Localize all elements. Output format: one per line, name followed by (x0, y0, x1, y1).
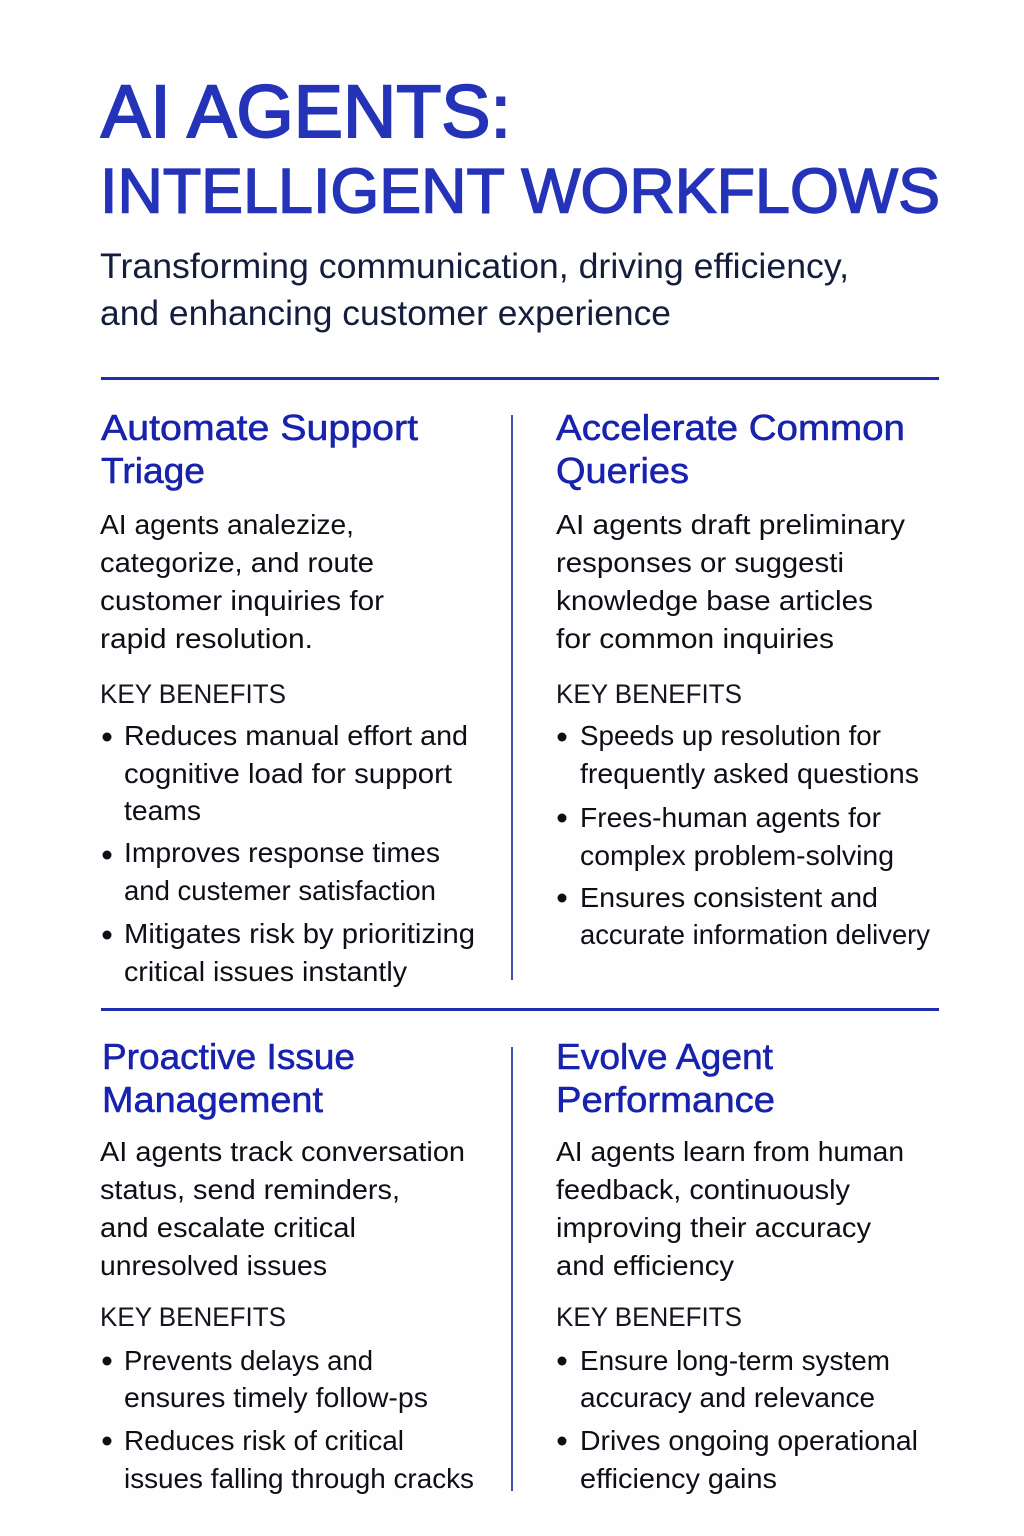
label: key benefits: KEY BENEFITS (556, 1302, 742, 1332)
benefits list: complex problem-solving (580, 840, 894, 871)
heading: proactive issue management: Management (102, 1079, 323, 1120)
benefits list: accuracy and relevance (580, 1382, 875, 1413)
heading: accelerate common queries: Accelerate Common (556, 407, 905, 448)
description: evolve agent performance (556, 1136, 904, 1281)
description: evolve agent performance: and efficiency (556, 1250, 734, 1281)
benefits list: Reduces manual effort and (124, 720, 468, 751)
benefits list: cognitive load for support (124, 758, 452, 789)
benefits list: ensures timely follow-ps (124, 1382, 428, 1413)
benefits list (102, 1345, 474, 1494)
panel: accelerate common queries (556, 407, 930, 950)
benefits list (558, 720, 930, 950)
heading: evolve agent performance: Performance (556, 1079, 775, 1120)
benefits list: Ensure long-term system (580, 1345, 890, 1376)
title: AI AGENTS: (101, 70, 511, 153)
heading: evolve agent performance (556, 1036, 775, 1120)
benefits list: Ensures consistent and (580, 882, 878, 913)
label: key benefits: KEY BENEFITS (100, 1302, 286, 1332)
subtitle: and enhancing customer experience (100, 294, 671, 333)
panel: proactive issue management (100, 1036, 474, 1494)
description: accelerate common queries: knowledge base articles (556, 585, 873, 616)
description: automate support triage: customer inquiries for (100, 585, 384, 616)
subtitle: Transforming communication, driving efficiency, (100, 247, 849, 286)
benefits list: Frees-human agents for (580, 802, 881, 833)
heading: automate support triage (101, 407, 418, 491)
description: proactive issue management (100, 1136, 465, 1281)
label: key benefits: KEY BENEFITS (100, 679, 286, 709)
description: proactive issue management: unresolved issues (100, 1250, 327, 1281)
heading: accelerate common queries: Queries (556, 450, 689, 491)
benefits list: Improves response times (124, 837, 440, 868)
benefits list: accurate information delivery (580, 919, 930, 950)
subtitle (100, 247, 849, 333)
heading: proactive issue management (102, 1036, 355, 1120)
description: proactive issue management: status, send reminders, (100, 1174, 400, 1205)
heading: automate support triage: Automate Support (101, 407, 418, 448)
panel: evolve agent performance (556, 1036, 918, 1494)
description: accelerate common queries: AI agents draft preliminary (556, 509, 905, 540)
benefits list: Prevents delays and (124, 1345, 373, 1376)
description: automate support triage: AI agents analezize, (100, 509, 354, 540)
benefits list: Reduces risk of critical (124, 1425, 404, 1456)
label: key benefits: KEY BENEFITS (556, 679, 742, 709)
benefits list: Drives ongoing operational (580, 1425, 918, 1456)
description: evolve agent performance: feedback, continuously (556, 1174, 850, 1205)
description: automate support triage: categorize, and route (100, 547, 374, 578)
benefits list: Mitigates risk by prioritizing (124, 918, 475, 949)
panel: automate support triage (100, 407, 475, 987)
benefits list (102, 720, 475, 987)
description: proactive issue management: AI agents track conversation (100, 1136, 465, 1167)
description: accelerate common queries (556, 509, 905, 654)
heading: automate support triage: Triage (101, 450, 205, 491)
benefits list: issues falling through cracks (124, 1463, 474, 1494)
title: INTELLIGENT WORKFLOWS (100, 156, 940, 226)
benefits list: Speeds up resolution for (580, 720, 881, 751)
benefits list (558, 1345, 918, 1494)
benefits list: critical issues instantly (124, 956, 407, 987)
benefits list: teams (124, 795, 201, 826)
description: evolve agent performance: AI agents learn from human (556, 1136, 904, 1167)
title (100, 70, 940, 226)
benefits list: efficiency gains (580, 1463, 777, 1494)
description: evolve agent performance: improving their accuracy (556, 1212, 871, 1243)
benefits list: and custemer satisfaction (124, 875, 436, 906)
heading: accelerate common queries (556, 407, 905, 491)
benefits list: frequently asked questions (580, 758, 919, 789)
description: proactive issue management: and escalate critical (100, 1212, 356, 1243)
heading: proactive issue management: Proactive Issue (102, 1036, 355, 1077)
heading: evolve agent performance: Evolve Agent (556, 1036, 773, 1077)
description: automate support triage: rapid resolution. (100, 623, 313, 654)
description: accelerate common queries: responses or suggesti (556, 547, 844, 578)
description: automate support triage (100, 509, 384, 654)
description: accelerate common queries: for common inquiries (556, 623, 834, 654)
